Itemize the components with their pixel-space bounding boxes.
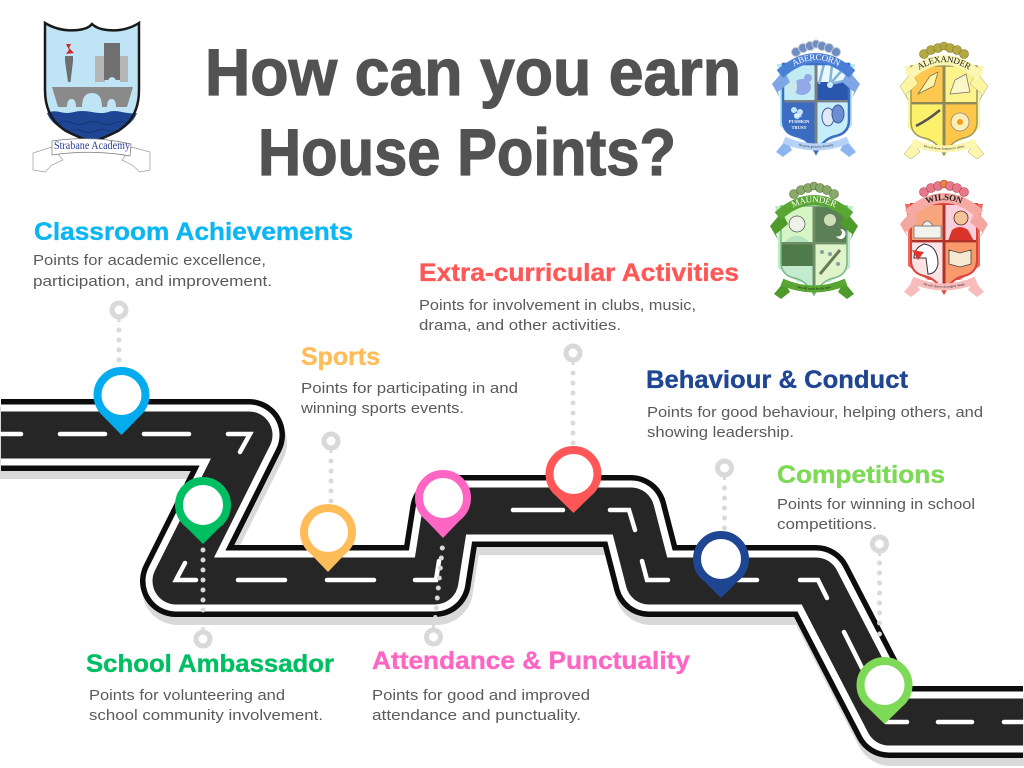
connector: Behaviour & Conduct: [718, 461, 732, 530]
house crest: Abercorn: TRUST: [791, 125, 807, 130]
connector: Attendance & Punctuality: [426, 546, 445, 644]
text block: Sports: [300, 343, 518, 417]
text block: Sports: Sports: [301, 343, 380, 371]
connector: Competitions: [872, 537, 886, 636]
text block: Attendance & Punctuality: [372, 647, 690, 724]
house crest: Alexander: ALEXANDER: [918, 56, 970, 70]
text block: Attendance & Punctuality: attendance and punctuality.: [372, 707, 581, 724]
text block: Attendance & Punctuality: Points for good and improved: [372, 687, 590, 704]
pin: Sports: [304, 508, 352, 572]
text block: Attendance & Punctuality: Attendance & Punctuality: [372, 647, 690, 675]
text block: Extra-curricular Activities: Points for involvement in clubs, music,: [419, 297, 696, 314]
text block: School Ambassador: Points for volunteering and: [89, 687, 285, 704]
pin: Classroom Achievements: [98, 371, 146, 435]
pin: Competitions: [860, 661, 908, 724]
text block: Competitions: competitions.: [777, 516, 877, 533]
text block: Competitions: Points for winning in school: [777, 496, 975, 513]
text block: Classroom Achievements: participation, and improvement.: [33, 273, 272, 290]
text block: Sports: Points for participating in and: [301, 380, 518, 397]
road surface: [1, 435, 1023, 722]
text block: Classroom Achievements: Points for academic excellence,: [33, 252, 266, 269]
text block: Extra-curricular Activities: [419, 259, 739, 334]
house crest: Abercorn: We grow green by diversity: [798, 144, 834, 148]
text block: Classroom Achievements: Classroom Achievements: [34, 218, 353, 246]
text block: Behaviour & Conduct: showing leadership.: [647, 424, 794, 441]
text block: Behaviour & Conduct: [646, 366, 983, 441]
text block: Classroom Achievements: [33, 218, 353, 290]
text block: Behaviour & Conduct: Points for good behaviour, helping others, and: [647, 404, 983, 421]
house crest: Maunder: [770, 182, 858, 299]
text block: Extra-curricular Activities: drama, and other activities.: [419, 317, 621, 334]
house crest: Maunder: We will reach for the stars: [798, 286, 831, 290]
text block: Behaviour & Conduct: Behaviour & Conduct: [646, 366, 909, 394]
text block: School Ambassador: school community involvement.: [89, 707, 323, 724]
house crest: Alexander: We will show kindness to others: [924, 144, 964, 150]
house crest: Abercorn: ABERCORN: [793, 54, 841, 66]
text block: Sports: winning sports events.: [300, 400, 464, 417]
text block: School Ambassador: [86, 650, 334, 724]
connector: School Ambassador: [196, 548, 210, 646]
title: [205, 35, 741, 189]
pin: Extra-curricular Activities: [550, 450, 598, 513]
connector: Classroom Achievements: [112, 303, 126, 362]
road: [0, 434, 1024, 730]
house crest: Wilson: WILSON: [924, 194, 964, 204]
pin: Behaviour & Conduct: [697, 535, 745, 598]
connector: Extra-curricular Activities: [566, 346, 580, 446]
text block: Competitions: [777, 461, 975, 533]
title: How can you earn: [205, 35, 741, 109]
title: House Points?: [258, 115, 676, 189]
school crest: Strabane Academy: [33, 23, 150, 172]
lane markings: [1, 434, 1023, 722]
house crest: Alexander: [900, 42, 988, 160]
house crest: Wilson: We will dare to do mighty things: [924, 282, 965, 288]
text block: Competitions: Competitions: [777, 461, 945, 489]
house crest: Wilson: [900, 180, 988, 297]
house crest: Abercorn: PUSHKIN: [789, 119, 810, 124]
pin: Attendance & Punctuality: [419, 474, 467, 538]
house crest: Abercorn: THE: [794, 113, 803, 118]
school crest: Strabane Academy: Strabane Academy: [54, 140, 130, 152]
pin: School Ambassador: [179, 481, 227, 544]
connector: Sports: [324, 434, 338, 504]
text block: School Ambassador: School Ambassador: [86, 650, 334, 678]
house crest: Abercorn: [772, 40, 860, 157]
text block: Extra-curricular Activities: Extra-curricular Activities: [419, 259, 739, 287]
house crest: Maunder: MAUNDER: [790, 196, 836, 208]
road edge: [1, 435, 1023, 722]
road shadow: [0, 443, 1024, 730]
road shoulder: [1, 435, 1023, 722]
